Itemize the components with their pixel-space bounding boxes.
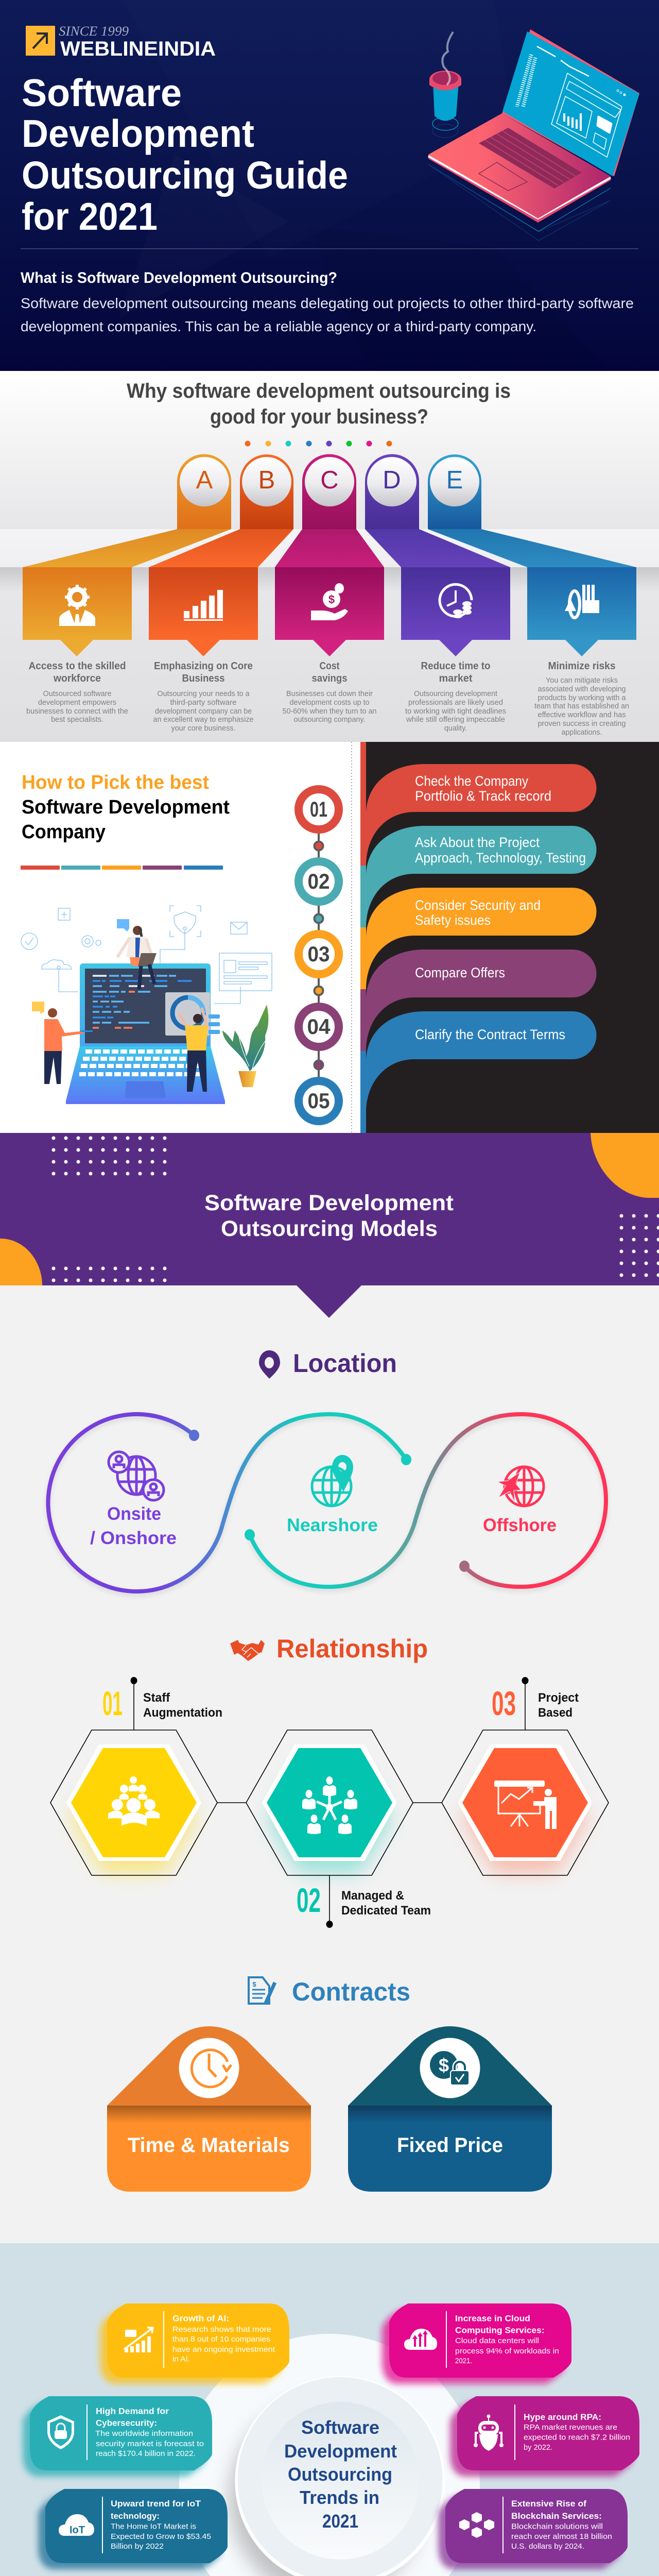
card text bbox=[26, 660, 629, 737]
icon: contract: $ bbox=[252, 1980, 256, 1988]
label: nearshore: Nearshore bbox=[287, 1515, 378, 1535]
text: card D bbox=[405, 660, 506, 733]
title: Software bbox=[22, 71, 182, 114]
trend: IoT: Upward trend for IoT bbox=[111, 2499, 201, 2509]
timeline: 04 bbox=[307, 1014, 331, 1039]
heading: Development bbox=[284, 2441, 397, 2462]
title: Outsourcing Guide bbox=[22, 154, 348, 197]
heading: Outsourcing Models bbox=[221, 1216, 438, 1241]
text: card C: 50-60% when they turn to an bbox=[282, 707, 377, 716]
text: card C: outsourcing company. bbox=[293, 716, 366, 724]
ribbon D: D bbox=[383, 466, 401, 494]
text: card D: Outsourcing development bbox=[414, 690, 497, 698]
ribbon A bbox=[23, 454, 231, 656]
relationship hexagons bbox=[50, 1677, 609, 1928]
step 3: Safety issues bbox=[415, 912, 491, 928]
icon: presentation bbox=[494, 1781, 557, 1829]
text: card A: workforce bbox=[53, 673, 101, 684]
icon: dollar lock bbox=[430, 2051, 469, 2085]
timeline: 01 bbox=[310, 797, 327, 821]
team illustration bbox=[21, 906, 281, 1104]
ribbon B: B bbox=[258, 466, 275, 494]
logo: WEBLINEINDIA bbox=[60, 38, 216, 60]
text: card B: Business bbox=[182, 673, 224, 684]
timeline: 03 bbox=[308, 942, 330, 966]
trend: AI: Research shows that more bbox=[172, 2326, 271, 2334]
trend: cloud computing: Computing Services: bbox=[455, 2326, 545, 2335]
trend: cybersecurity bbox=[23, 2396, 212, 2477]
contract card: fixed price bbox=[348, 2026, 552, 2192]
disc bbox=[179, 2334, 480, 2576]
trend: IoT bbox=[38, 2489, 228, 2569]
text: card E: Minimize risks bbox=[548, 660, 616, 672]
trend: cybersecurity: security market is forecast to bbox=[96, 2440, 204, 2448]
trend: AI: in AI. bbox=[172, 2355, 190, 2364]
ribbon D bbox=[365, 454, 510, 656]
ribbon C bbox=[275, 454, 384, 656]
trend: RPA: expected to reach $7.2 billion bbox=[524, 2434, 630, 2442]
heading bbox=[127, 380, 511, 428]
text: card B: your core business. bbox=[171, 724, 236, 733]
text: card D: professionals are likely used bbox=[408, 699, 503, 707]
text: card B: Emphasizing on Core bbox=[154, 660, 253, 672]
step 2: Approach, Technology, Testing bbox=[415, 850, 586, 866]
label: managed team: Dedicated Team bbox=[341, 1904, 431, 1918]
text: card C: development costs up to bbox=[289, 699, 370, 707]
heading: Why software development outsourcing is bbox=[127, 380, 511, 402]
text: card A: Access to the skilled bbox=[29, 660, 126, 672]
label: staff augmentation: 01 bbox=[102, 1684, 123, 1722]
label: offshore: Offshore bbox=[483, 1515, 557, 1535]
icon: contract bbox=[249, 1977, 275, 2004]
title bbox=[22, 71, 348, 238]
trend: cloud computing: Increase in Cloud bbox=[455, 2313, 530, 2324]
trend: cloud computing: 2021. bbox=[455, 2357, 472, 2365]
icon: time to market bbox=[440, 584, 472, 618]
trend: cybersecurity: reach $170.4 billion in 2022. bbox=[96, 2450, 196, 2458]
text: card C: savings bbox=[312, 673, 347, 684]
label: project based bbox=[492, 1677, 579, 1730]
text: card C: Cost bbox=[319, 660, 340, 672]
trend: blockchain: reach over almost 18 billion bbox=[511, 2533, 612, 2541]
text: card E: You can mitigate risks bbox=[546, 676, 618, 685]
step 5: Clarify the Contract Terms bbox=[415, 1027, 565, 1042]
trend: blockchain: U.S. dollars by 2024. bbox=[511, 2543, 584, 2551]
heading: Software bbox=[301, 2417, 379, 2438]
contract card: time and materials bbox=[107, 2026, 311, 2192]
step 1: Portfolio & Track record bbox=[415, 788, 551, 804]
icon: blockchain bbox=[459, 2512, 494, 2538]
person right bbox=[179, 1008, 208, 1092]
hexagon: managed team bbox=[246, 1730, 431, 1928]
dots bbox=[245, 441, 392, 446]
icon: cloud arrows bbox=[404, 2329, 437, 2350]
heading: Trends in bbox=[300, 2487, 379, 2508]
person left bbox=[32, 1002, 93, 1084]
steps bbox=[360, 742, 596, 1133]
label: staff augmentation: Staff bbox=[143, 1691, 170, 1705]
text: card C bbox=[282, 660, 377, 724]
icon: skilled workforce bbox=[59, 585, 95, 626]
trend: RPA: Hype around RPA: bbox=[524, 2412, 601, 2422]
trend: RPA bbox=[450, 2396, 639, 2477]
trend: cloud computing: Cloud data centers will bbox=[455, 2337, 539, 2345]
intro text: development companies. This can be a reliable agency or a third-party company. bbox=[21, 318, 536, 334]
location heading: Location bbox=[293, 1349, 397, 1378]
panel: why outsourcing bbox=[0, 371, 659, 742]
icon: offshore bbox=[497, 1467, 544, 1506]
heading bbox=[204, 1191, 454, 1241]
text: card A: development empowers bbox=[38, 699, 116, 707]
icon: shield bbox=[47, 2415, 74, 2449]
label: onsite: / Onshore bbox=[90, 1528, 177, 1548]
trend: RPA: by 2022. bbox=[524, 2444, 552, 2452]
label: onsite: Onsite bbox=[107, 1504, 161, 1524]
person top bbox=[117, 919, 157, 989]
text: card B: development company can be bbox=[155, 707, 252, 716]
text: card B: Outsourcing your needs to a bbox=[158, 690, 250, 698]
ribbon A: A bbox=[196, 466, 213, 494]
text: card B: third-party software bbox=[170, 699, 237, 707]
trend: AI: Growth of AI: bbox=[172, 2313, 229, 2324]
ribbon B bbox=[149, 454, 293, 656]
icon: AI growth bbox=[124, 2328, 153, 2352]
relationship heading: Relationship bbox=[276, 1634, 428, 1663]
step 3 bbox=[366, 888, 596, 989]
timeline: 05 bbox=[308, 1089, 330, 1113]
trend: cloud computing: process 94% of workloads in bbox=[455, 2347, 559, 2355]
heading: Software Development bbox=[22, 796, 230, 818]
step 3: Consider Security and bbox=[415, 897, 541, 913]
heading: Software Development bbox=[204, 1191, 454, 1215]
text: card B bbox=[153, 660, 253, 733]
title: Development bbox=[22, 112, 254, 155]
icon: pin bbox=[259, 1350, 280, 1379]
step 5 bbox=[366, 1011, 596, 1133]
hexagon: project based bbox=[442, 1677, 609, 1875]
icon: team bbox=[108, 1776, 160, 1826]
label: project based: Project bbox=[538, 1691, 579, 1705]
text: card D: Reduce time to bbox=[421, 660, 490, 672]
trend: blockchain: Blockchain Services: bbox=[511, 2511, 602, 2521]
heading bbox=[22, 772, 230, 843]
ribbon E: E bbox=[446, 466, 463, 494]
icon: network bbox=[302, 1776, 357, 1834]
trend: IoT: technology: bbox=[111, 2511, 160, 2521]
icon: minimize risks bbox=[565, 585, 599, 618]
panel: trends bbox=[0, 2243, 659, 2576]
icon: IoT cloud bbox=[59, 2514, 94, 2536]
icon: handshake bbox=[230, 1640, 265, 1661]
text: card E: associated with developing bbox=[537, 685, 626, 693]
trend: IoT: The Home IoT Market is bbox=[111, 2522, 196, 2531]
step 1 bbox=[366, 764, 596, 866]
text: card E: team that has established an bbox=[534, 702, 629, 710]
label: managed team: 02 bbox=[297, 1881, 321, 1919]
text: card A: businesses to connect with the bbox=[26, 707, 128, 716]
trend: cybersecurity: The worldwide information bbox=[95, 2430, 193, 2438]
label: project based: 03 bbox=[492, 1684, 516, 1722]
heading: 2021 bbox=[322, 2511, 358, 2532]
trend: cybersecurity: High Demand for bbox=[96, 2406, 169, 2416]
label: managed team bbox=[297, 1875, 431, 1928]
text: card E: applications. bbox=[561, 728, 602, 737]
step 2 bbox=[366, 826, 596, 927]
label: staff augmentation bbox=[102, 1677, 222, 1730]
header panel bbox=[0, 0, 659, 371]
label: staff augmentation: Augmentation bbox=[143, 1706, 222, 1720]
trend: AI: have an ongoing investment bbox=[172, 2346, 275, 2354]
step 2: Ask About the Project bbox=[415, 835, 540, 850]
logo: SINCE 1999 bbox=[59, 24, 129, 39]
text: card B: an excellent way to emphasize bbox=[153, 716, 253, 724]
step 4 bbox=[366, 950, 596, 1051]
intro text: Software development outsourcing means delegating out projects to other third-party software bbox=[21, 295, 634, 311]
timeline: 02 bbox=[308, 869, 330, 893]
icon: dollar lock: $ bbox=[439, 2055, 449, 2076]
divider bbox=[21, 248, 638, 249]
location loop diagram bbox=[48, 1414, 606, 1594]
text: card E bbox=[534, 660, 629, 737]
laptop illustration bbox=[428, 29, 639, 241]
text: card A: best specialists. bbox=[51, 716, 103, 724]
text: card E: proven success in creating bbox=[537, 720, 626, 728]
intro text: What is Software Development Outsourcing? bbox=[21, 269, 337, 286]
text: card A bbox=[26, 660, 128, 724]
trend: AI: than 8 out of 10 companies bbox=[172, 2335, 270, 2344]
icon: IoT cloud: IoT bbox=[70, 2524, 85, 2536]
text: card C: Businesses cut down their bbox=[286, 690, 373, 698]
trend: RPA: RPA market revenues are bbox=[524, 2424, 617, 2432]
contracts heading: Contracts bbox=[292, 1977, 410, 2006]
heading: Company bbox=[22, 821, 106, 843]
ribbon C: C bbox=[320, 466, 339, 494]
label: project based: Based bbox=[538, 1706, 573, 1720]
icon: robot bbox=[474, 2414, 504, 2451]
plant bbox=[222, 1005, 281, 1087]
heading: How to Pick the best bbox=[22, 772, 209, 793]
text: card D: to working with tight deadlines bbox=[405, 707, 506, 716]
models banner bbox=[0, 1133, 659, 1318]
icon: cost savings: $ bbox=[328, 593, 335, 606]
trend: AI bbox=[100, 2303, 289, 2384]
step 4: Compare Offers bbox=[415, 965, 505, 980]
text: card D: while still offering impeccable bbox=[406, 716, 505, 724]
trend: cybersecurity: Cybersecurity: bbox=[96, 2418, 157, 2428]
step 1: Check the Company bbox=[415, 773, 528, 789]
icon: bar chart bbox=[184, 590, 223, 621]
trend: blockchain: Extensive Rise of bbox=[511, 2499, 586, 2509]
trend: blockchain: Blockchain solutions will bbox=[511, 2522, 603, 2531]
trend: cloud computing bbox=[382, 2303, 571, 2384]
icon: nearshore bbox=[312, 1455, 353, 1506]
heading: good for your business? bbox=[210, 405, 428, 428]
text: card D: market bbox=[439, 673, 473, 684]
logo bbox=[26, 24, 216, 60]
text: card E: effective workflow and has bbox=[537, 711, 626, 719]
trend: blockchain bbox=[438, 2489, 628, 2569]
heading bbox=[284, 2417, 397, 2532]
contract card: fixed price: Fixed Price bbox=[397, 2134, 503, 2157]
hexagon: staff augmentation bbox=[50, 1677, 222, 1875]
intro text bbox=[21, 269, 634, 334]
text: card E: products by working with a bbox=[537, 694, 626, 702]
text: card A: Outsourced software bbox=[43, 690, 111, 698]
trend: IoT: Billion by 2022 bbox=[111, 2543, 164, 2551]
icon: cost savings bbox=[311, 583, 348, 620]
models background bbox=[0, 1285, 659, 2243]
contract card: time and materials: Time & Materials bbox=[128, 2134, 290, 2157]
title: for 2021 bbox=[22, 195, 158, 238]
timeline bbox=[299, 789, 339, 1121]
label: managed team: Managed & bbox=[341, 1889, 404, 1903]
icon: onsite bbox=[109, 1452, 164, 1500]
colour bars bbox=[21, 866, 223, 870]
icon: clock bbox=[192, 2050, 231, 2087]
heading: Outsourcing bbox=[288, 2464, 392, 2485]
label: onsite bbox=[90, 1504, 177, 1548]
text: card D: quality. bbox=[444, 724, 467, 733]
ribbon E bbox=[428, 454, 636, 656]
trend: IoT: Expected to Grow to $53.45 bbox=[111, 2533, 211, 2541]
panel: how to pick bbox=[0, 742, 659, 1133]
